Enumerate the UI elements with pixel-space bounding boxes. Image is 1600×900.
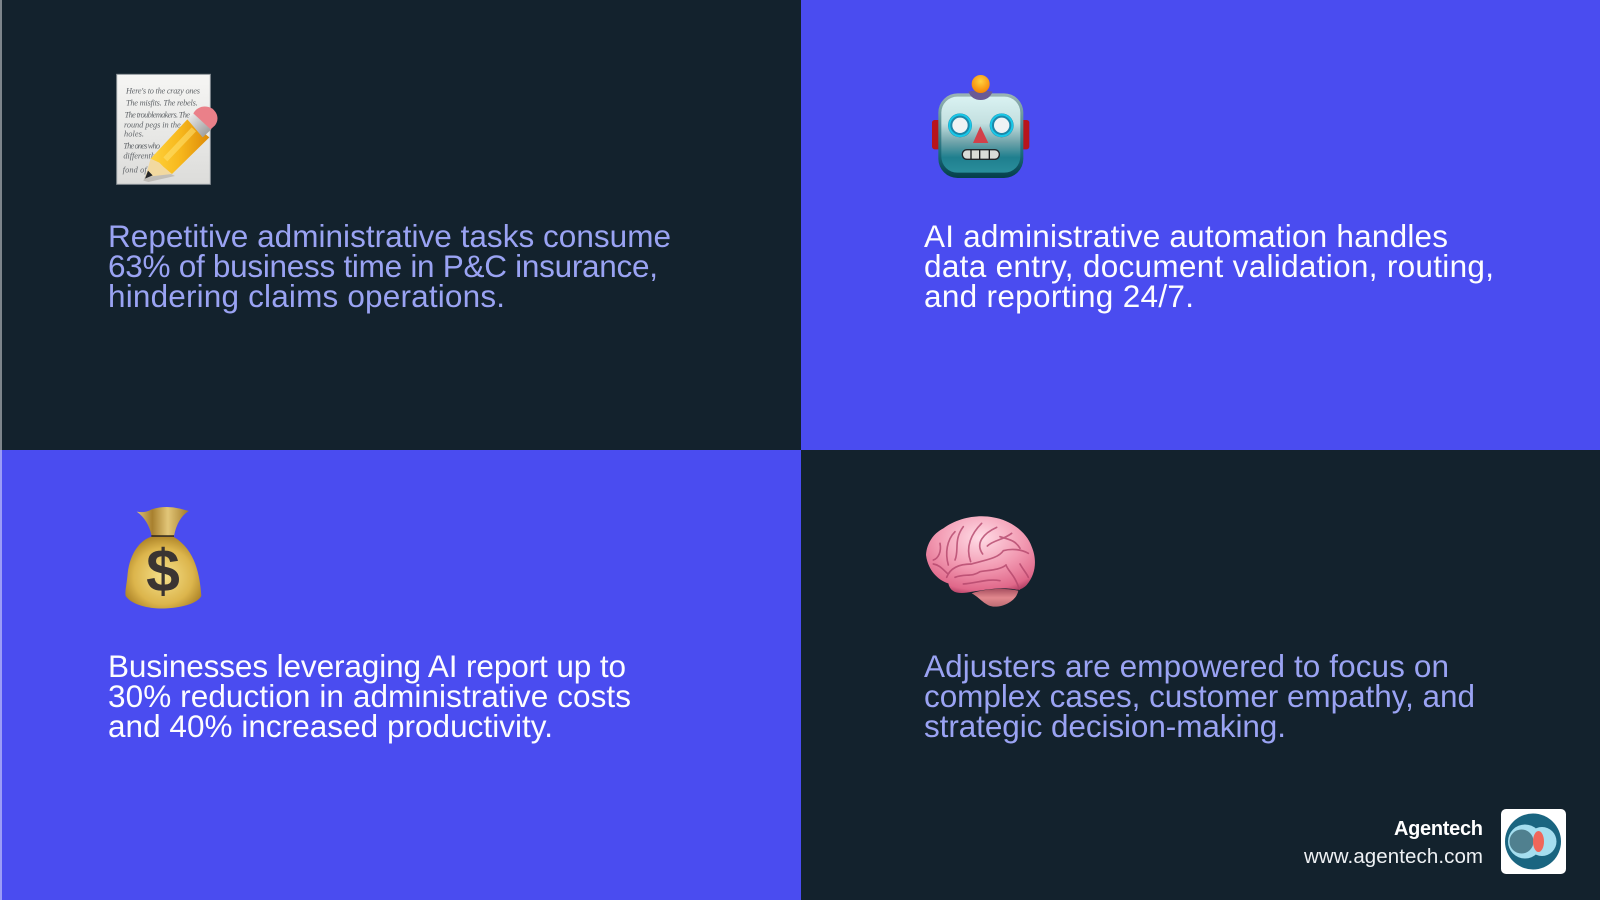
- icon: money bag: [125, 507, 202, 608]
- left edge strip: [0, 0, 2, 900]
- brand name and website: [1303, 818, 1483, 868]
- text: solution statement: and reporting 24/7.: [924, 278, 1194, 314]
- text: solution statement: AI administrative automation handles: [924, 218, 1448, 254]
- icon: memo and pencil: Here's to the crazy ones: [125, 86, 200, 95]
- icon: memo and pencil: round pegs in the: [124, 120, 181, 129]
- text: problem statement: Repetitive administrative tasks consume: [108, 218, 671, 254]
- icon: memo and pencil: [116, 74, 218, 185]
- panel: savings: [0, 450, 801, 900]
- icon: money bag: $: [146, 537, 180, 605]
- brand name and website: www.agentech.com: [1303, 845, 1483, 868]
- icon: brain: [926, 516, 1035, 607]
- icon: memo and pencil: The ones who: [123, 141, 160, 150]
- icon: robot: [932, 75, 1030, 178]
- text: empowerment statement: complex cases, customer empathy, and: [924, 678, 1475, 714]
- logo: [1501, 809, 1566, 874]
- text: savings statement: [108, 648, 631, 744]
- text: savings statement: Businesses leveraging AI report up to: [108, 648, 626, 684]
- icon: memo and pencil: The troublemakers. The: [125, 110, 190, 119]
- text: solution statement: [924, 218, 1494, 314]
- text: empowerment statement: strategic decision-making.: [924, 708, 1286, 744]
- text: empowerment statement: [924, 648, 1475, 744]
- icon: memo and pencil: holes.: [124, 130, 144, 139]
- icon: memo and pencil: differently: [123, 152, 157, 161]
- text: problem statement: hindering claims operations.: [108, 278, 505, 314]
- text: empowerment statement: Adjusters are empowered to focus on: [924, 648, 1449, 684]
- panel: problem: [0, 0, 801, 450]
- text: solution statement: data entry, document validation, routing,: [924, 248, 1494, 284]
- text: problem statement: [108, 218, 671, 314]
- text: savings statement: and 40% increased productivity.: [108, 708, 553, 744]
- text: savings statement: 30% reduction in administrative costs: [108, 678, 631, 714]
- text: problem statement: 63% of business time in P&C insurance,: [108, 248, 658, 284]
- footer: brand block: [1303, 809, 1566, 874]
- brand name and website: Agentech: [1394, 818, 1483, 840]
- icon: memo and pencil: fond of: [123, 166, 148, 175]
- panel: empowerment: [801, 450, 1600, 900]
- panel: solution: [801, 0, 1600, 450]
- icon: memo and pencil: The misfits. The rebels.: [126, 99, 198, 108]
